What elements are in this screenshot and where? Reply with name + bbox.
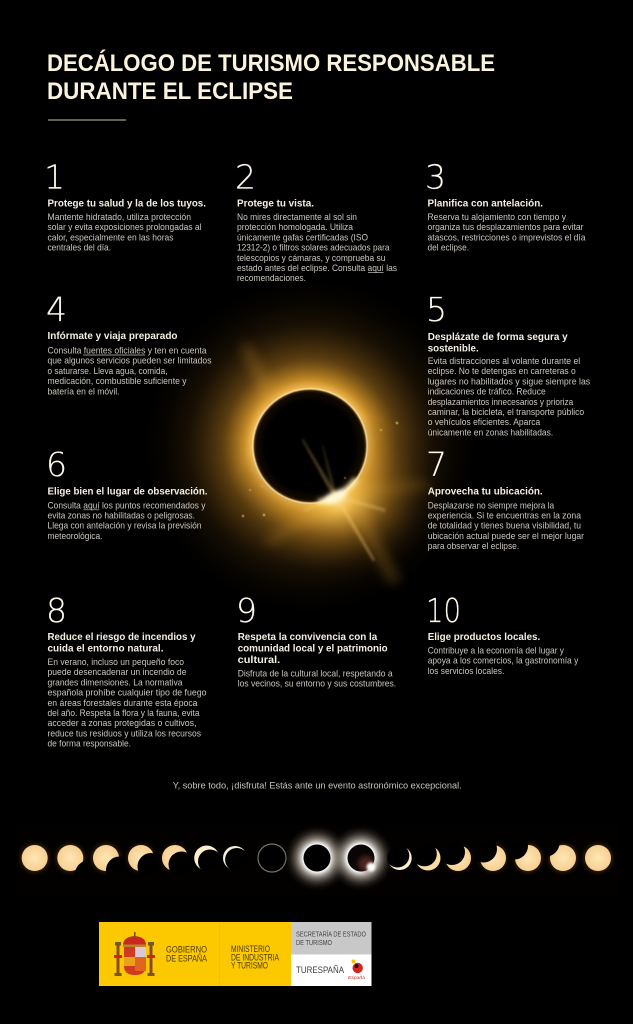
body 5 (428, 356, 591, 437)
body 8: grandes dimensiones. La normativa (48, 677, 183, 687)
number 3: 3 (425, 158, 446, 196)
body 5: Evita distracciones al volante durante el (428, 356, 580, 366)
body 5: o vehículos eficientes. Aparca (428, 417, 541, 427)
body 1 (48, 212, 202, 253)
body 9: Disfruta de la cultural local, respetando a (238, 668, 393, 678)
number 4: 4 (46, 290, 67, 329)
body 2: estado antes del eclipse. Consulta aquí las (237, 263, 397, 273)
body 9: los vecinos, su entorno y sus costumbres. (238, 678, 396, 688)
logo text: Ministerio (231, 944, 279, 971)
logo text: Ministerio: DE INDUSTRIA (231, 952, 279, 962)
heading 5: sostenible. (428, 344, 479, 355)
body 9 (238, 668, 396, 688)
body 5: desplazamientos innecesarios y prioriza (428, 397, 574, 407)
heading 7: Aprovecha tu ubicación. (428, 486, 543, 498)
body 2: protección homologada. Utiliza (237, 222, 354, 232)
heading 9 (238, 632, 388, 666)
body 4 (48, 346, 212, 396)
body 8: del año. Respeta la flora y la fauna, evita (48, 708, 200, 718)
item 6 (46, 445, 208, 541)
body 10 (428, 646, 579, 676)
body 8: española prohíbe cualquier tipo de fuego (48, 688, 206, 698)
heading 8: cuida el entorno natural. (48, 644, 164, 655)
logo text: Gobierno de España: GOBIERNO (166, 945, 207, 955)
body 8: puede desencadenar un incendio de (48, 667, 186, 677)
logo text: Secretaría de Estado: DE TURISMO (296, 938, 332, 947)
item 8 (46, 591, 206, 749)
heading 9: cultural. (238, 655, 280, 666)
number 1: 1 (44, 158, 65, 196)
body 4: o saturarse. Lleva agua, comida, (48, 366, 168, 376)
body 10: los servicios locales. (428, 666, 504, 676)
item 1 (44, 158, 206, 253)
body 6: Llega con antelación y revisa la previsión (48, 521, 202, 531)
body 10: Contribuye a la economía del lugar y (428, 646, 564, 656)
body 8: acceder a zonas protegidas o cultivos, (48, 718, 196, 728)
body 5: caminar, la bicicleta, el transporte público (428, 407, 584, 417)
item 10 (426, 591, 579, 676)
heading 10: Elige productos locales. (428, 632, 540, 643)
body 2: 12312-2) o filtros solares adecuados para (237, 243, 390, 253)
heading 2: Protege tu vista. (237, 198, 314, 210)
item 7 (426, 445, 584, 551)
body 8: En verano, incluso un pequeño foco (48, 657, 184, 667)
title (47, 49, 495, 105)
body 4: que algunos servicios pueden ser limitados (48, 356, 212, 366)
body 7: Desplazarse no siempre mejora la (428, 500, 555, 510)
logo text: Ministerio: Y TURISMO (231, 961, 268, 971)
heading 6: Elige bien el lugar de observación. (48, 486, 208, 498)
item 4 (46, 290, 212, 396)
logo text: Secretaría de Estado (296, 930, 366, 947)
heading 5 (428, 332, 568, 355)
number 8: 8 (46, 591, 67, 630)
body 10: apoya a los comercios, la gastronomía y (428, 656, 579, 666)
heading 3: Planifica con antelación. (428, 198, 543, 210)
number 9: 9 (236, 591, 257, 630)
heading 8: Reduce el riesgo de incendios y (48, 632, 196, 643)
body 5: lugares no habilitados y sigue siempre las (428, 376, 591, 386)
body 7 (428, 500, 584, 551)
body 6 (48, 500, 206, 541)
number 2: 2 (235, 158, 256, 196)
heading 5: Desplázate de forma segura y (428, 332, 568, 343)
number 7: 7 (426, 445, 447, 484)
eclipse illustration (135, 271, 485, 621)
body 5: únicamente en zonas habilitadas. (428, 427, 553, 437)
item 2 (235, 158, 397, 283)
body 2 (237, 212, 397, 283)
body 1: Mantente hidratado, utiliza protección (48, 212, 191, 222)
item 9 (236, 591, 396, 688)
body 7: experiencia. Si te encuentras en la zona (428, 510, 582, 520)
government and Turespaña logo block (99, 922, 372, 986)
icon: Spanish coat of arms (114, 932, 155, 976)
eclipse phases strip (18, 827, 615, 889)
body 4: batería en el móvil. (48, 386, 120, 396)
body 2: únicamente gafas certificadas (ISO (237, 232, 368, 242)
logo text: Gobierno de España: DE ESPAÑA (166, 954, 207, 964)
body 3: atascos, restricciones o imprevistos el día (428, 232, 586, 242)
number 5: 5 (426, 290, 447, 329)
heading 1: Protege tu salud y la de los tuyos. (48, 198, 206, 210)
icon: Spain tourism sun logo (348, 960, 366, 980)
item 3 (425, 158, 586, 253)
number 10: 10 (426, 591, 461, 630)
body 5: eclipse. No te detengas en carreteras o (428, 366, 576, 376)
body 8 (48, 657, 206, 749)
logo text: Turespaña: TURESPAÑA (296, 964, 345, 975)
icon: Spain tourism sun logo: España (348, 975, 366, 980)
heading 9: Respeta la convivencia con la (238, 632, 378, 643)
body 2: telescopios y cámaras, y comprueba su (237, 253, 386, 263)
left partial phases (18, 842, 246, 874)
body 7: ubicación actual puede ser el mejor lugar (428, 531, 584, 541)
heading 8 (48, 632, 196, 655)
logo text: Secretaría de Estado: SECRETARÍA DE ESTADO (296, 930, 366, 939)
body 1: centrales del día. (48, 243, 111, 253)
body 8: reduce tus residuos y utiliza los recursos (48, 728, 201, 738)
body 2: No mires directamente al sol sin (237, 212, 357, 222)
logo text: Gobierno de España (166, 945, 207, 964)
right partial phases (387, 842, 614, 874)
closing line: Y, sobre todo, ¡disfruta! Estás ante un evento astronómico excepcional. (173, 780, 462, 792)
body 7: de totalidad y tienes buena visibilidad, tu (428, 521, 581, 531)
body 8: de forma responsable. (48, 739, 131, 749)
body 6: evita zonas no habilitadas o peligrosas. (48, 510, 195, 520)
body 4: Consulta fuentes oficiales y ten en cuenta (48, 346, 207, 356)
body 7: para observar el eclipse. (428, 541, 519, 551)
item 5 (426, 290, 591, 437)
body 3: organiza tus desplazamientos para evitar (428, 222, 584, 232)
heading 9: comunidad local y el patrimonio (238, 644, 388, 655)
body 2: recomendaciones. (237, 273, 306, 283)
number 6: 6 (46, 445, 67, 484)
body 3: Reserva tu alojamiento con tiempo y (428, 212, 566, 222)
title: DECÁLOGO DE TURISMO RESPONSABLE (47, 49, 495, 77)
body 3: del eclipse. (428, 243, 469, 253)
totality phases (258, 824, 395, 892)
body 4: medicación, combustible suficiente y (48, 376, 187, 386)
body 1: calor, especialmente en las horas (48, 232, 174, 242)
body 6: Consulta aquí los puntos recomendados y (48, 500, 206, 510)
body 5: indicaciones de tráfico. Reduce (428, 387, 546, 397)
logo text: Ministerio: MINISTERIO (231, 944, 270, 954)
body 1: solar y evita exposiciones prolongadas al (48, 222, 202, 232)
body 3 (428, 212, 586, 253)
title: DURANTE EL ECLIPSE (47, 78, 293, 105)
body 6: meteorológica. (48, 531, 102, 541)
heading 4: Infórmate y viaja preparado (48, 331, 178, 342)
body 8: en áreas forestales durante esta época (48, 698, 198, 708)
